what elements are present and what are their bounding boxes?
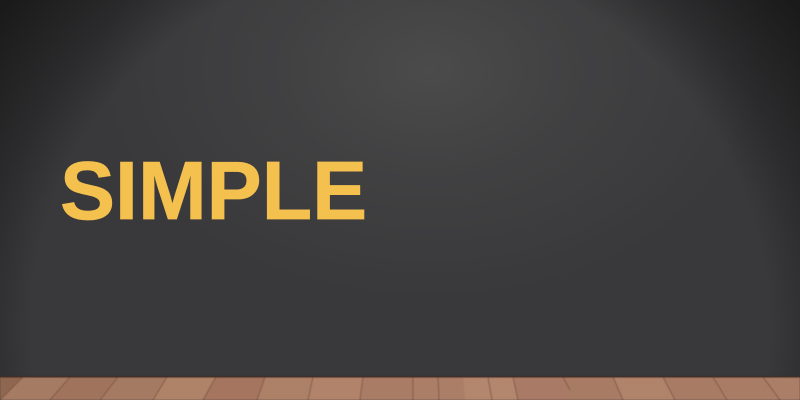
title: SIMPLE (60, 145, 367, 237)
wooden floor (0, 376, 800, 400)
